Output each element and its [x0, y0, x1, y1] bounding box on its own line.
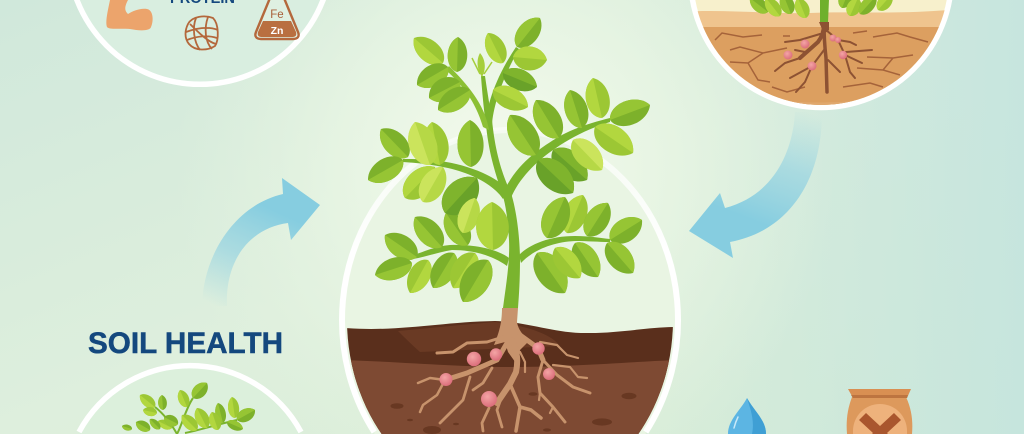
- bottom-left plant: [121, 379, 258, 434]
- central bud: [472, 53, 492, 77]
- foliage: right lower branch: [526, 191, 648, 301]
- soil layers and cracks: [698, 0, 944, 105]
- panel: nutrition circle top left: [68, 0, 332, 84]
- icon: protein structure: [186, 16, 218, 50]
- arrow: curved right arrow into centre: [689, 112, 822, 258]
- panel: depleted soil circle top right: [690, 0, 952, 110]
- foliage: upper crown: [407, 11, 548, 119]
- icon: muscle arm: [106, 0, 153, 30]
- icon: fertiliser bag crossed out: [847, 389, 912, 434]
- panel: central plant circle: [342, 11, 678, 434]
- icon: water drop: [728, 398, 766, 434]
- panel: healthy plant circle bottom left: [78, 366, 302, 434]
- foliage: right upper branch: [499, 75, 654, 203]
- root nodules: [440, 342, 555, 407]
- foliage: left lower branch: [372, 209, 500, 309]
- icon: iron and zinc flask: Zn: [271, 25, 283, 37]
- top-right roots: [775, 22, 872, 92]
- arrow: curved left arrow into centre: [202, 178, 320, 306]
- foliage: left upper branch: [363, 118, 509, 252]
- icon: iron and zinc flask: [255, 0, 299, 39]
- plant stems: [403, 47, 610, 308]
- heading: soil health: SOIL HEALTH: [88, 327, 283, 360]
- top-right root nodules: [784, 34, 847, 70]
- top-right plant leaves and stem: [746, 0, 897, 23]
- roots: [418, 308, 590, 431]
- soil specks: [390, 392, 636, 434]
- icon: iron and zinc flask: Fe: [270, 9, 284, 21]
- soil cross-section: [345, 308, 675, 434]
